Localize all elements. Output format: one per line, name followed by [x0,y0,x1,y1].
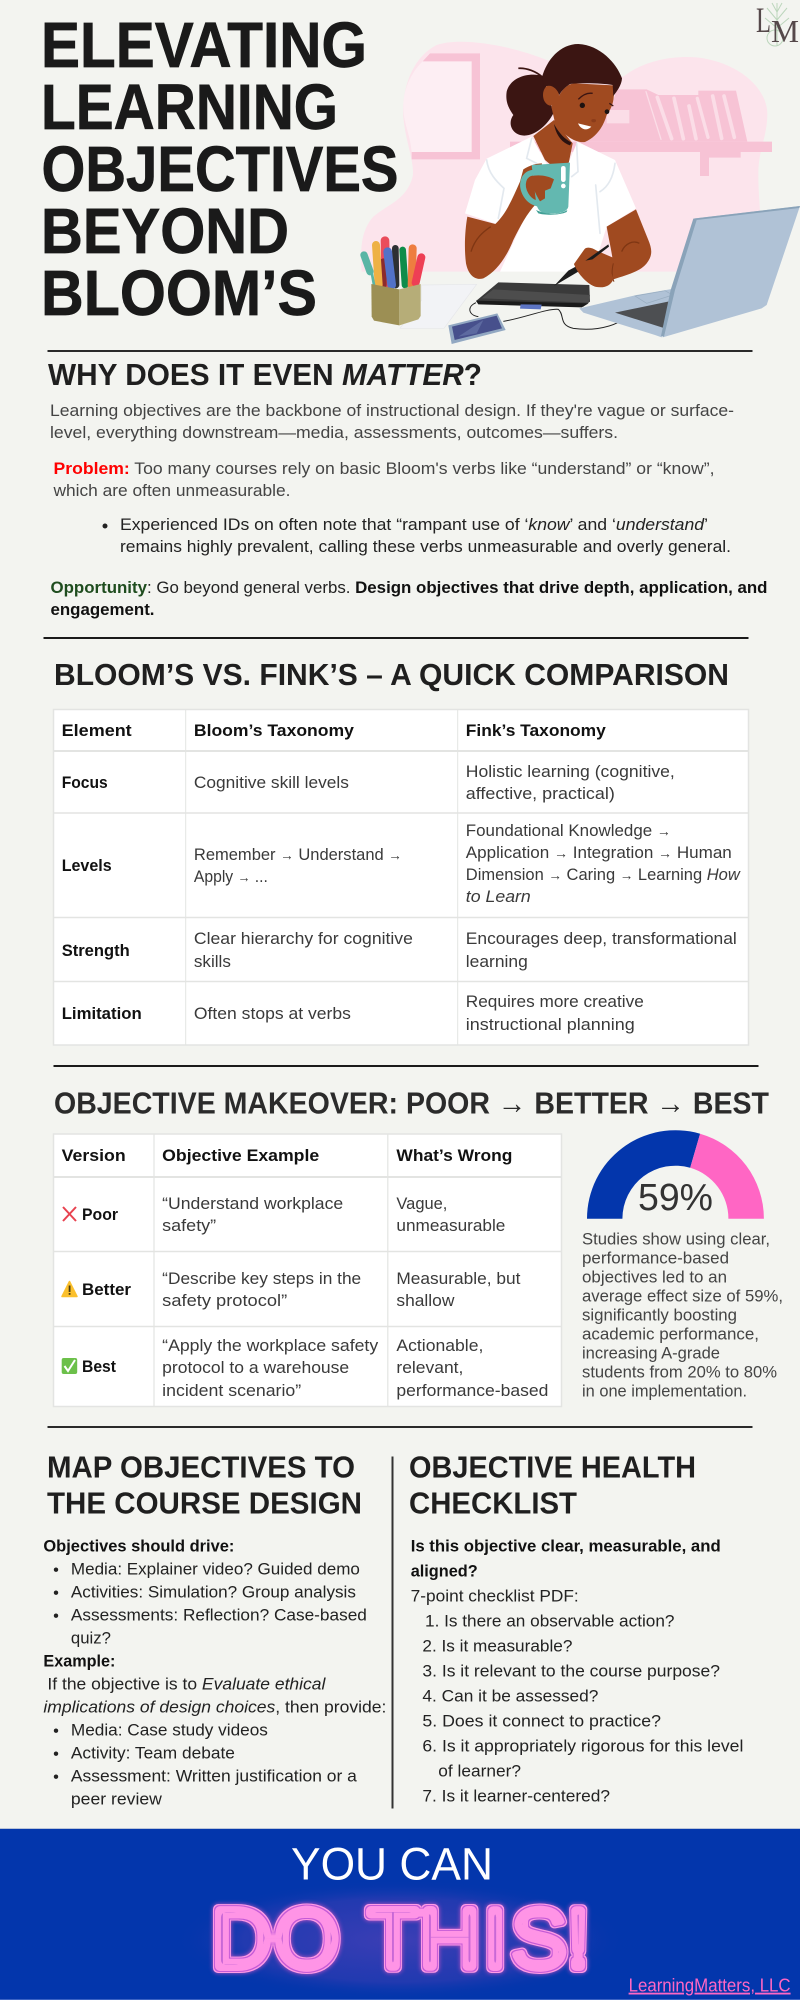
example list: Activity: Team debate [71,1744,235,1763]
heading: objective makeover: OBJECTIVE MAKEOVER: POOR → BETTER → BEST [54,1086,769,1120]
row: focus: affective, practical) [466,784,615,803]
numbered checklist: 5. Does it connect to practice? [422,1712,661,1731]
numbered checklist: 3. Is it relevant to the course purpose? [422,1662,720,1681]
title: BEYOND [41,195,289,267]
example list: implications of design choices , then provide: [43,1698,386,1717]
footer banner [0,1828,800,2000]
section: why does it even matter [48,358,768,619]
numbered checklist: of learner? [438,1762,521,1781]
panel: objective health checklist [409,1450,743,1806]
cable [470,303,618,329]
heading: map objectives [47,1450,362,1520]
example list: Example: [43,1652,115,1671]
row: best: performance-based [396,1381,548,1400]
table header row [62,1146,512,1165]
book stripes [646,92,734,139]
title: BLOOM’S [41,257,317,329]
opportunity statement: Opportunity: Go beyond general verbs. Design objectives that drive depth, application, and [50,578,768,597]
intro paragraph [50,401,734,442]
numbered checklist: 7. Is it learner-centered? [422,1787,610,1806]
objectives should drive list: Objectives should drive: [43,1537,234,1556]
example list: peer review [71,1790,163,1809]
table header row: Version [62,1146,126,1165]
neon do this: DO THIS! [211,1892,590,1987]
row: poor [63,1194,505,1235]
bullet: experienced IDs [102,515,731,556]
logo: LM with tree: L [756,0,771,40]
row: levels: to Learn [466,887,531,906]
panel: map objectives [43,1450,386,1809]
example list [43,1652,386,1809]
intro paragraph: level, everything downstream—media, assessments, outcomes—suffers. [50,423,618,442]
problem statement: which are often unmeasurable. [52,481,290,500]
hair top [542,44,622,96]
row: poor: Vague, [396,1194,447,1213]
heading: health checklist: OBJECTIVE HEALTH [409,1450,696,1484]
row: focus [62,762,675,803]
opportunity statement: engagement. [50,600,154,619]
row: poor: Poor [82,1205,118,1224]
heading: health checklist: CHECKLIST [409,1486,577,1520]
row: better: “Describe key steps in the [162,1269,361,1288]
table header row: Bloom’s Taxonomy [194,721,354,740]
left arm [465,163,542,279]
laptop base [579,289,674,337]
row: best: protocol to a warehouse [162,1358,349,1377]
row: better [62,1269,521,1310]
opportunity statement [50,578,768,619]
neon glow halo [175,1880,625,2000]
row: better: safety protocol” [162,1291,288,1310]
bullet: experienced IDs: Experienced IDs on often note that “rampant use of ‘ know’ and ‘understand’ [120,515,708,534]
row: better: Better [82,1280,131,1299]
title: LEARNING [41,71,338,143]
column divider [392,1456,394,1808]
wall frame [403,61,472,152]
fingers on mug [530,175,554,201]
row: best: “Apply the workplace safety [162,1336,379,1355]
shirt [465,137,636,272]
heading: why it matters: WHY DOES IT EVEN MATTER? [48,358,482,392]
icon: green check [62,1358,77,1374]
row: strength: learning [466,952,528,971]
objectives should drive list: Media: Explainer video? Guided demo [71,1560,360,1579]
attribution link: LearningMatters, LLC [629,1976,791,1996]
gauge description: objectives led to an [582,1268,727,1287]
gauge description: students from 20% to 80% [582,1363,777,1382]
tablet [476,282,590,307]
heading: map objectives: THE COURSE DESIGN [47,1486,362,1520]
table: Bloom vs Fink [54,710,748,1045]
eyes and smile [580,103,585,108]
row: strength: Strength [62,941,130,960]
table header row: Element [62,721,132,740]
chart: 59% gauge [587,1130,764,1219]
right arm [574,209,651,287]
title: OBJECTIVES [42,133,398,205]
row: poor: “Understand workplace [162,1194,343,1213]
example list: If the objective is to Evaluate ethical [47,1675,327,1694]
numbered checklist: 4. Can it be assessed? [422,1687,598,1706]
chart: 59% gauge: 59% [638,1177,713,1219]
hair bun [506,75,553,136]
row: levels: Application → Integration → Human [466,843,732,862]
table header row: Objective Example [162,1146,319,1165]
heading: health checklist [409,1450,696,1520]
objectives should drive list: Activities: Simulation? Group analysis [71,1583,356,1602]
phone [448,313,506,344]
numbered checklist [411,1587,743,1806]
face [551,83,614,142]
problem statement [52,459,714,500]
gauge description: in one implementation. [582,1382,747,1401]
row: strength: skills [194,952,231,971]
icon: red cross [63,1207,76,1221]
numbered checklist: 7-point checklist PDF: [411,1587,579,1606]
row: limitation [62,992,644,1034]
numbered checklist: 1. Is there an observable action? [425,1612,674,1631]
table header row: What’s Wrong [396,1146,512,1165]
you can: YOU CAN [291,1838,493,1889]
row: strength: Encourages deep, transformational [466,929,737,948]
row: focus: Focus [62,773,108,792]
checklist question: aligned? [411,1562,478,1581]
row: levels: Levels [62,856,112,875]
gauge description: significantly boosting [582,1306,737,1325]
laptop screen [663,206,800,337]
checklist question [411,1537,721,1581]
row: strength [62,929,737,971]
gauge description: performance-based [582,1249,729,1268]
neck [533,120,573,168]
row: limitation: instructional planning [466,1015,635,1034]
row: levels: Foundational Knowledge → [466,821,671,840]
table header row [62,721,606,740]
bullet: experienced IDs: remains highly prevalent, calling these verbs unmeasurable and overly general. [120,537,731,556]
row: levels: Remember → Understand → [194,845,402,864]
rule under title [48,350,752,352]
title: ELEVATING [41,9,367,81]
coffee mug [532,163,570,214]
rule under comparison [54,1065,758,1067]
objectives should drive list: Assessments: Reflection? Case-based [71,1606,367,1625]
row: limitation: Often stops at verbs [194,1004,351,1023]
row: better: shallow [396,1291,455,1310]
row: poor: safety” [162,1216,217,1235]
gauge description: average effect size of 59%, [582,1287,783,1306]
gauge description: academic performance, [582,1325,759,1344]
row: best [62,1336,548,1400]
row: best: incident scenario” [162,1381,302,1400]
gauge description: increasing A-grade [582,1344,720,1363]
pink background blob [361,42,767,272]
numbered checklist: 6. Is it appropriately rigorous for this level [422,1737,743,1756]
row: poor: unmeasurable [396,1216,505,1235]
example list: Media: Case study videos [71,1721,268,1740]
table header row: Fink’s Taxonomy [466,721,606,740]
bookshelf [510,89,772,176]
gauge description [582,1230,783,1401]
intro paragraph: Learning objectives are the backbone of instructional design. If they're vague or surface- [50,401,734,420]
row: best: Actionable, [396,1336,483,1355]
rule under why section [44,637,748,639]
checklist question: Is this objective clear, measurable, and [411,1537,721,1556]
gauge description: Studies show using clear, [582,1230,770,1249]
stylus [554,244,609,286]
problem statement: Problem: Too many courses rely on basic Bloom's verbs like “understand” or “know”, [54,459,714,478]
hand over stylus [574,258,613,287]
row: levels [62,821,741,906]
table: objective makeover [54,1134,562,1406]
logo: LM with tree [756,0,799,49]
title [41,9,398,329]
heading: map objectives: MAP OBJECTIVES TO [47,1450,355,1484]
desk paper [400,284,477,328]
objectives should drive list [43,1537,367,1648]
row: best: Best [82,1357,116,1376]
row: levels: Apply → ... [194,867,268,886]
rule under makeover [48,1426,752,1428]
row: best: relevant, [396,1358,463,1377]
illustration: woman at desk with laptop [361,42,800,344]
pen cup with markers [364,241,421,285]
objectives should drive list: quiz? [71,1629,111,1648]
chin shadow [554,124,572,145]
row: strength: Clear hierarchy for cognitive [194,929,413,948]
row: better: Measurable, but [396,1269,521,1288]
collar and creases [487,138,615,233]
row: limitation: Limitation [62,1004,142,1023]
row: focus: Holistic learning (cognitive, [466,762,675,781]
row: levels: Dimension → Caring → Learning How [466,865,741,884]
logo: LM with tree: M [771,13,799,49]
numbered checklist: 2. Is it measurable? [422,1637,572,1656]
heading: comparison: BLOOM’S VS. FINK’S – A QUICK COMPARISON [54,658,729,692]
icon: warning triangle [62,1282,77,1296]
example list: Assessment: Written justification or a [71,1767,357,1786]
row: limitation: Requires more creative [466,992,644,1011]
row: focus: Cognitive skill levels [194,773,349,792]
